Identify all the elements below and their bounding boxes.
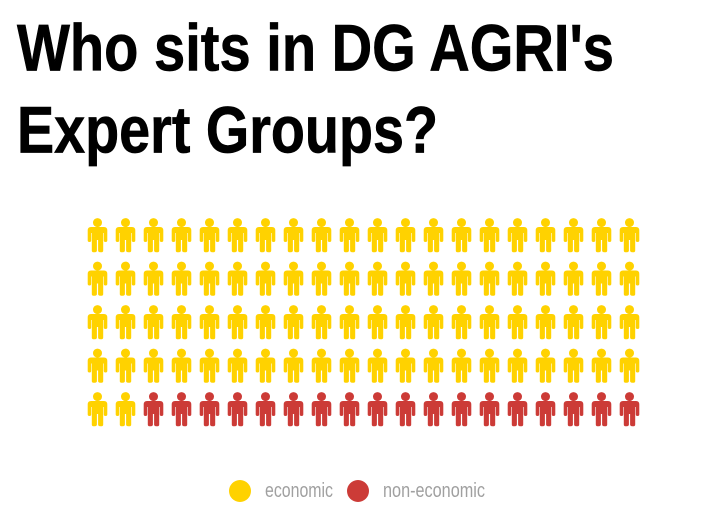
legend label: economic: economic <box>265 480 333 502</box>
legend <box>229 480 485 502</box>
row 5: economic people <box>88 392 135 426</box>
row 4: economic <box>88 349 639 383</box>
title: Who sits in DG AGRI's <box>17 10 614 84</box>
pictogram chart: 100 people, 82 economic and 18 non-economic <box>88 218 639 426</box>
row 2: economic <box>88 262 639 296</box>
row 1: economic <box>88 218 639 252</box>
legend label: non-economic: non-economic <box>383 480 485 502</box>
title <box>17 10 614 166</box>
legend swatch: non-economic <box>347 480 369 502</box>
row 3: economic <box>88 305 639 339</box>
row 5: non-economic people <box>144 392 639 426</box>
legend swatch: economic <box>229 480 251 502</box>
title: Expert Groups? <box>17 92 438 166</box>
